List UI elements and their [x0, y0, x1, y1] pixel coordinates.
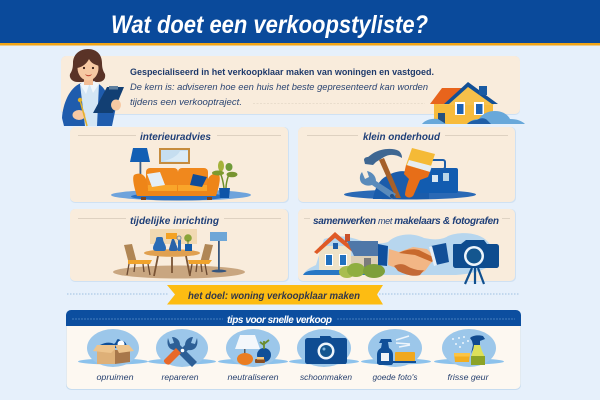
- intro text: Gespecialiseerd in het verkoopklaar maken van woningen en vastgoed.: [130, 66, 434, 77]
- tip: neutraliseren: [218, 329, 288, 382]
- tip: frisse geur: [434, 329, 504, 382]
- goal ribbon: [167, 285, 383, 304]
- tip: frisse geur: frisse geur: [448, 372, 490, 382]
- panel: tijdelijke inrichting: [70, 209, 289, 282]
- intro text: De kern is: adviseren hoe een huis het beste gepresenteerd kan worden: [130, 81, 428, 92]
- illustration: houses, handshake and camera: [303, 232, 499, 284]
- tip: schoonmaken: [289, 329, 359, 382]
- tip: goede foto's: [361, 329, 431, 382]
- panel: samenwerken: [298, 209, 516, 284]
- tip: schoonmaken: schoonmaken: [300, 372, 352, 382]
- dotted divider right: [376, 293, 520, 295]
- tip: repareren: [148, 329, 216, 382]
- tip: neutraliseren: neutraliseren: [228, 372, 279, 382]
- tip: repareren: repareren: [162, 372, 199, 382]
- intro text: [130, 66, 434, 107]
- illustration: tools: [344, 148, 476, 200]
- icon: stylist with clipboard: [62, 49, 124, 126]
- header band: [0, 0, 600, 46]
- goal ribbon: het doel: woning verkoopklaar maken: [188, 290, 360, 302]
- tip: opruimen: opruimen: [96, 372, 134, 382]
- illustration: dining table: [113, 229, 245, 278]
- dotted divider left: [67, 293, 168, 295]
- tips heading: tips voor snelle verkoop: [227, 315, 332, 326]
- heading: tijdelijke inrichting: [130, 216, 219, 227]
- panel: interieuradvies: [70, 127, 289, 203]
- panel: introduction: [61, 56, 520, 115]
- panel: klein onderhoud: [298, 127, 516, 203]
- title: Wat doet een verkoopstyliste?: [111, 11, 428, 39]
- illustration: sofa and lamp: [111, 148, 251, 200]
- heading: samenwerken met makelaars & fotografen: [313, 216, 499, 227]
- icon: house: [422, 82, 525, 124]
- tip: goede foto's: goede foto's: [372, 372, 418, 382]
- panel: tips: [66, 310, 521, 390]
- heading: klein onderhoud: [363, 132, 441, 143]
- heading: interieuradvies: [140, 132, 211, 143]
- intro text: tijdens een verkooptraject.: [130, 96, 242, 107]
- tip: opruimen: [78, 329, 148, 382]
